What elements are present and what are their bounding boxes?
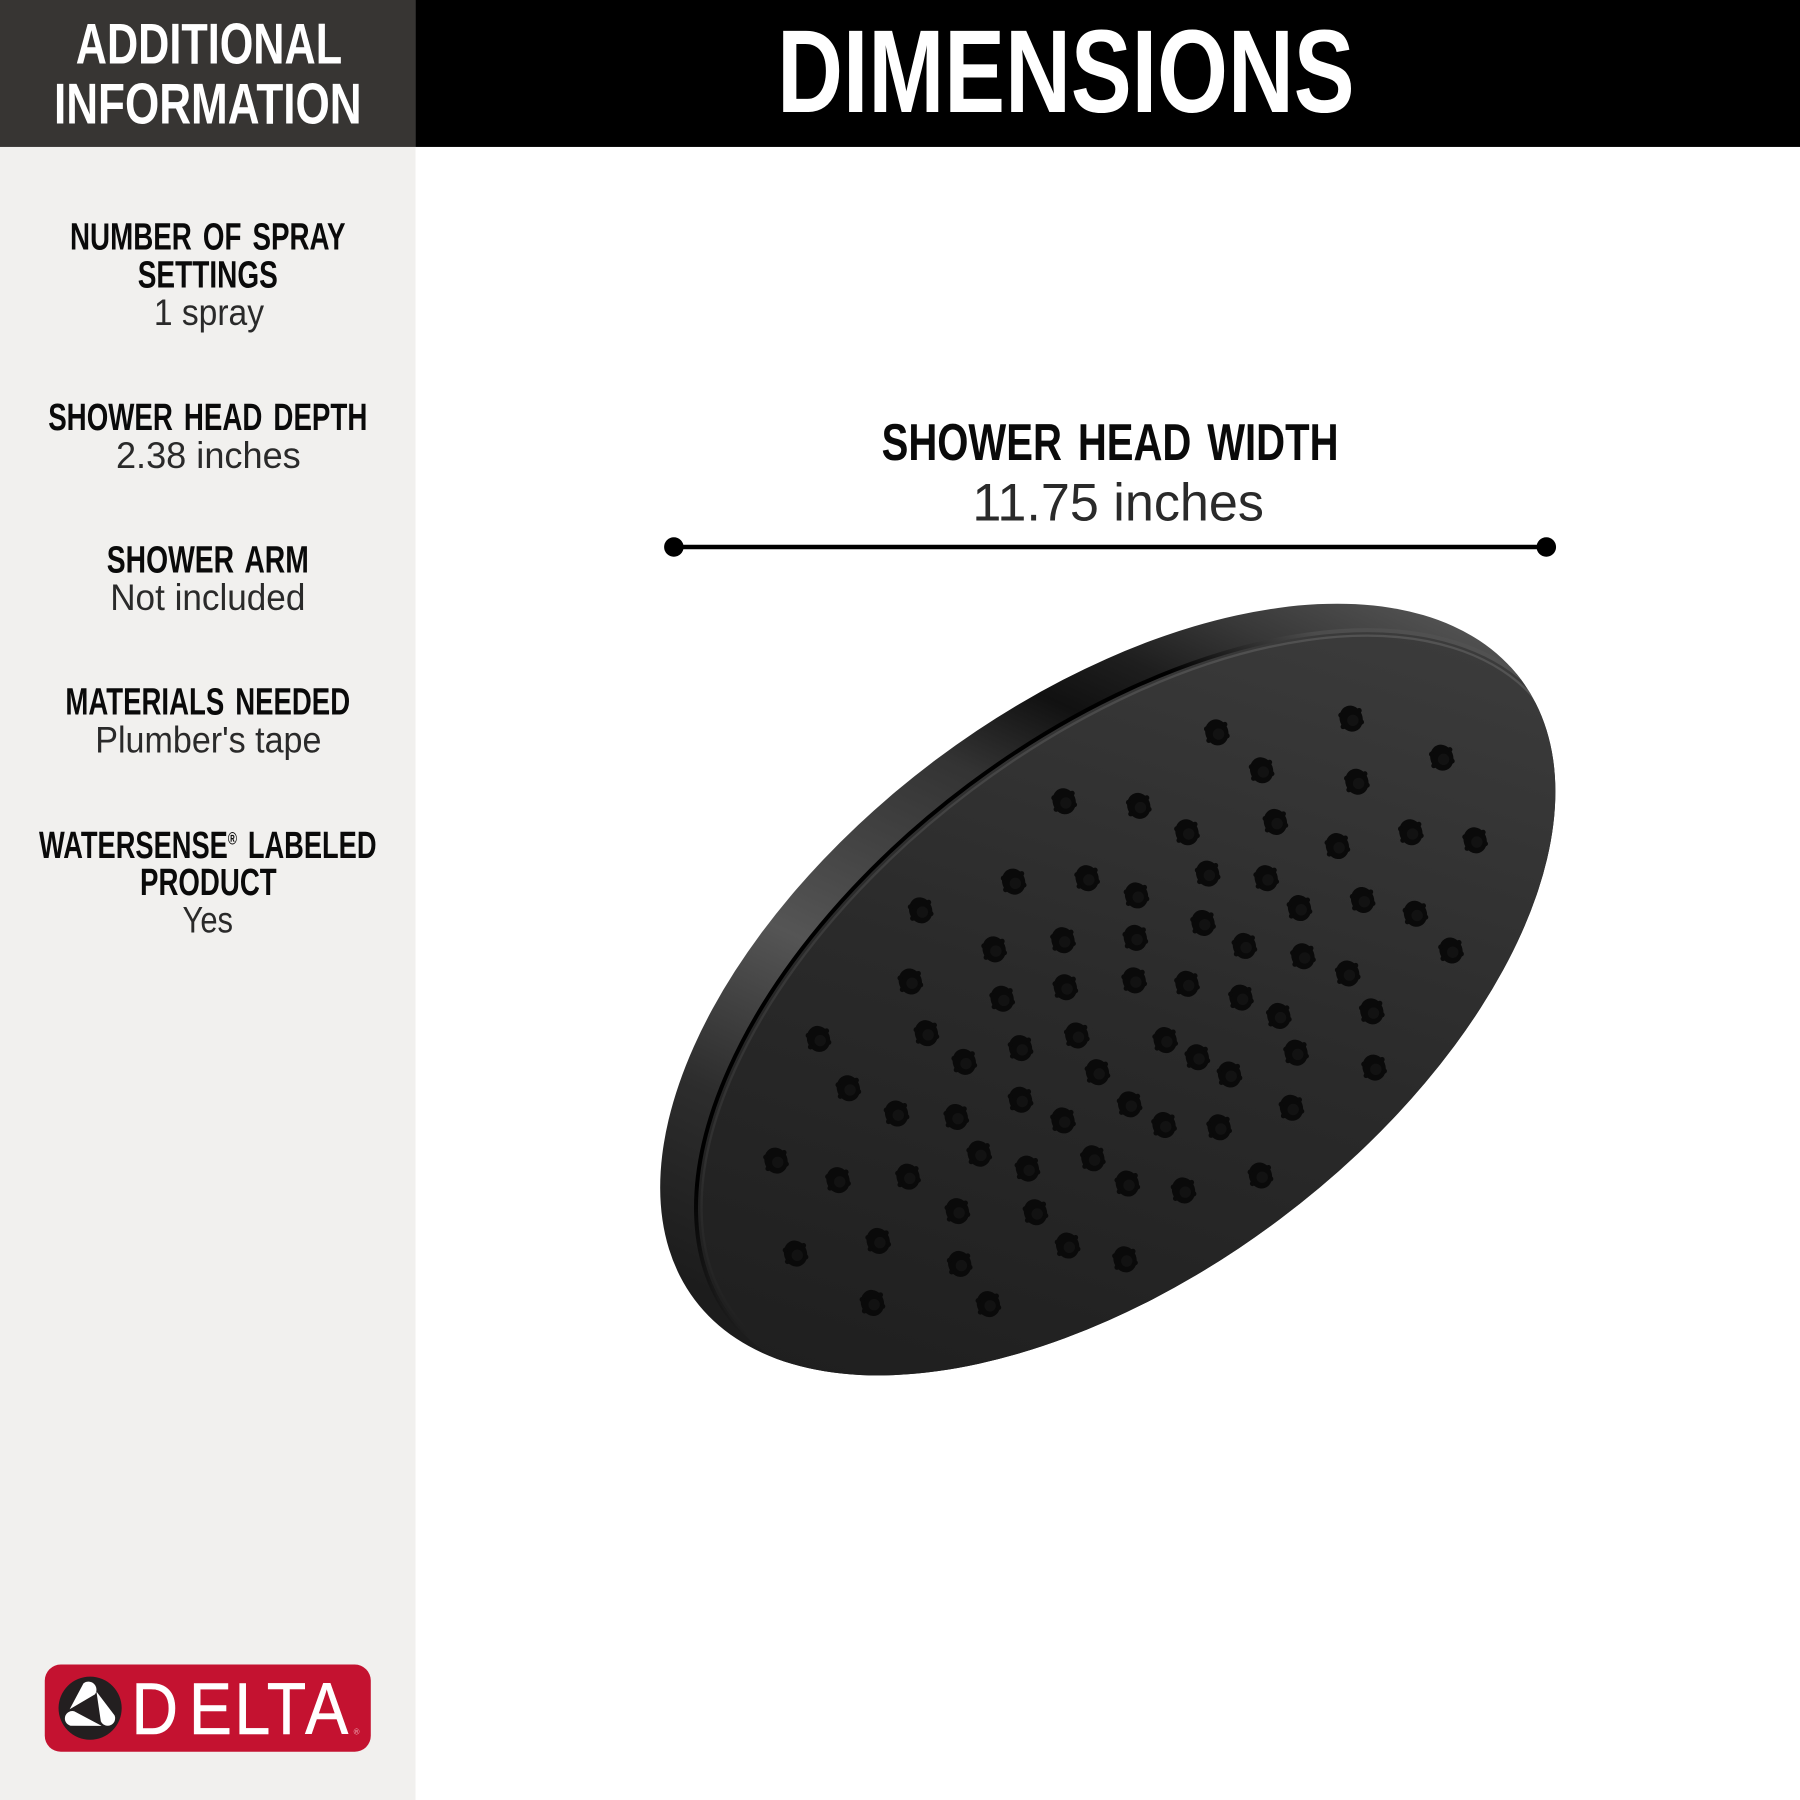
- text block: shower head depth: [48, 397, 367, 476]
- logo: Delta: ®: [354, 1728, 360, 1737]
- text block: number of spray settings: [70, 217, 346, 333]
- text block: shower head width: 11.75 inches: [972, 474, 1264, 533]
- text block: watersense labeled product: PRODUCT: [140, 862, 277, 904]
- text block: materials needed: [65, 682, 350, 760]
- text block: watersense labeled product: Yes: [183, 900, 233, 941]
- text block: materials needed: MATERIALS NEEDED: [65, 682, 350, 724]
- panel: dimensions header: [416, 0, 1800, 147]
- text block: watersense labeled product: ®: [228, 828, 237, 848]
- panel: sidebar background: [0, 147, 416, 1800]
- text block: number of spray settings: NUMBER OF SPRAY: [70, 217, 346, 259]
- text block: watersense labeled product: LABELED: [237, 825, 377, 867]
- text block: watersense labeled product: WATERSENSE: [39, 825, 301, 867]
- shower head nozzles: [761, 702, 1490, 1320]
- text block: number of spray settings: 1 spray: [154, 292, 265, 333]
- text block: number of spray settings: SETTINGS: [138, 255, 278, 297]
- text block: materials needed: Plumber's tape: [95, 719, 321, 760]
- text block: watersense labeled product: [39, 825, 377, 941]
- text block: shower arm: SHOWER ARM: [107, 539, 309, 581]
- panel: additional information header: INFORMATION: [54, 72, 362, 136]
- text block: shower arm: [107, 539, 309, 618]
- text block: shower head depth: SHOWER HEAD DEPTH: [48, 397, 367, 439]
- text block: shower head width: [882, 413, 1339, 533]
- panel: dimensions header: DIMENSIONS: [777, 6, 1355, 138]
- logo: Delta: [45, 1665, 371, 1752]
- panel: additional information header: ADDITIONAL: [76, 13, 342, 77]
- panel: additional information header: [0, 0, 416, 147]
- logo: Delta: DELTA: [131, 1667, 349, 1750]
- text block: shower arm: Not included: [110, 577, 305, 618]
- text block: shower head depth: 2.38 inches: [116, 435, 301, 476]
- arrow: width dimension line: [664, 537, 1556, 557]
- icon: shower head: [660, 604, 1556, 1376]
- text block: shower head width: SHOWER HEAD WIDTH: [882, 413, 1339, 471]
- icon: Delta triangle mark: [59, 1677, 122, 1740]
